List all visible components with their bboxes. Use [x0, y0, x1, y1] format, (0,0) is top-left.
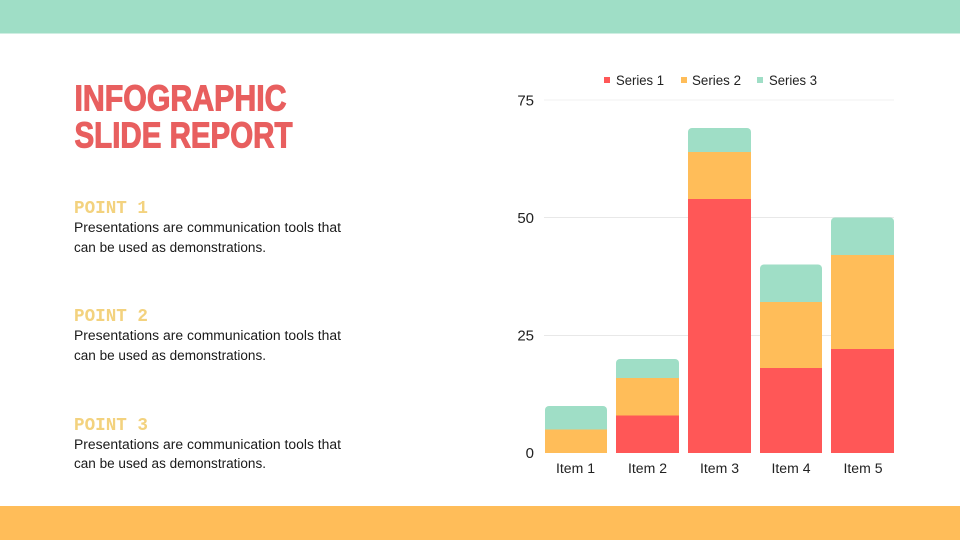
x axis labels: Item 2 [628, 461, 667, 476]
text block: point 3: Presentations are communication tools that [74, 437, 341, 452]
title: SLIDE REPORT [74, 114, 293, 156]
stacked bar chart [517, 73, 894, 476]
text block: point 1: Presentations are communication tools that [74, 220, 341, 235]
text block: point 1 [74, 199, 341, 255]
text block: point 3 [74, 416, 341, 471]
y axis labels: 50 [517, 210, 534, 227]
text block: point 2: Presentations are communication tools that [74, 328, 341, 343]
x axis labels: Item 5 [844, 461, 882, 476]
bar: item 1 [545, 406, 607, 453]
title: INFOGRAPHIC [74, 78, 287, 118]
chart legend: Series 2 [692, 73, 741, 88]
text block: point 2: POINT 2 [74, 307, 148, 327]
text block: point 2 [74, 307, 341, 363]
top banner [0, 0, 960, 34]
text block: point 1: can be used as demonstrations. [74, 240, 266, 255]
x axis labels: Item 4 [772, 461, 811, 476]
chart legend: Series 3 [769, 73, 817, 88]
chart legend: Series 1 [616, 73, 664, 88]
x axis labels: Item 3 [700, 461, 739, 476]
y axis labels: 75 [517, 92, 534, 110]
text block: point 1: POINT 1 [74, 199, 148, 219]
y axis labels [517, 92, 534, 462]
title [74, 78, 293, 156]
bar: item 4 [760, 264, 822, 453]
bar: item 5 [831, 218, 894, 453]
chart legend [604, 73, 817, 88]
text block: point 3: POINT 3 [74, 416, 148, 436]
bar: item 2 [616, 359, 679, 453]
x axis labels: Item 1 [556, 461, 595, 476]
y axis labels: 0 [526, 445, 534, 462]
y axis labels: 25 [517, 328, 534, 344]
x axis labels [556, 461, 882, 476]
text block: point 3: can be used as demonstrations. [74, 456, 266, 471]
text block: point 2: can be used as demonstrations. [74, 348, 266, 363]
bar: item 3 [688, 128, 751, 453]
bottom banner [0, 506, 960, 540]
